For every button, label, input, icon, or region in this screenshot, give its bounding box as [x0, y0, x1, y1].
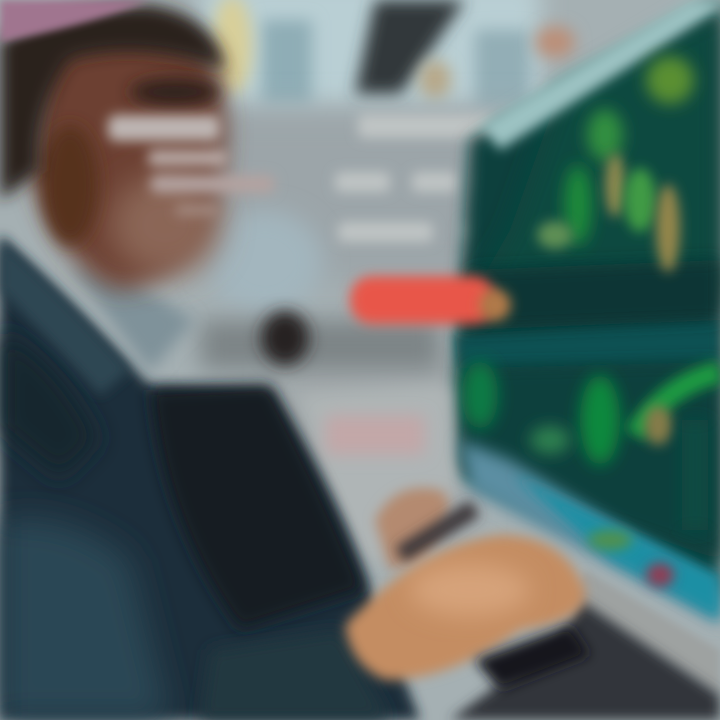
person: neck and collar — [70, 265, 195, 372]
blurred glasses reflections — [108, 115, 275, 215]
hand on keyboard — [261, 311, 590, 690]
desk and lower screen edge — [300, 385, 720, 720]
blurred text rows in the center — [335, 114, 575, 242]
person: jacket — [0, 235, 420, 720]
right monitor with green chart — [450, 0, 720, 600]
person: face — [0, 5, 226, 290]
red screen element — [350, 276, 511, 324]
pink cap — [0, 0, 150, 42]
